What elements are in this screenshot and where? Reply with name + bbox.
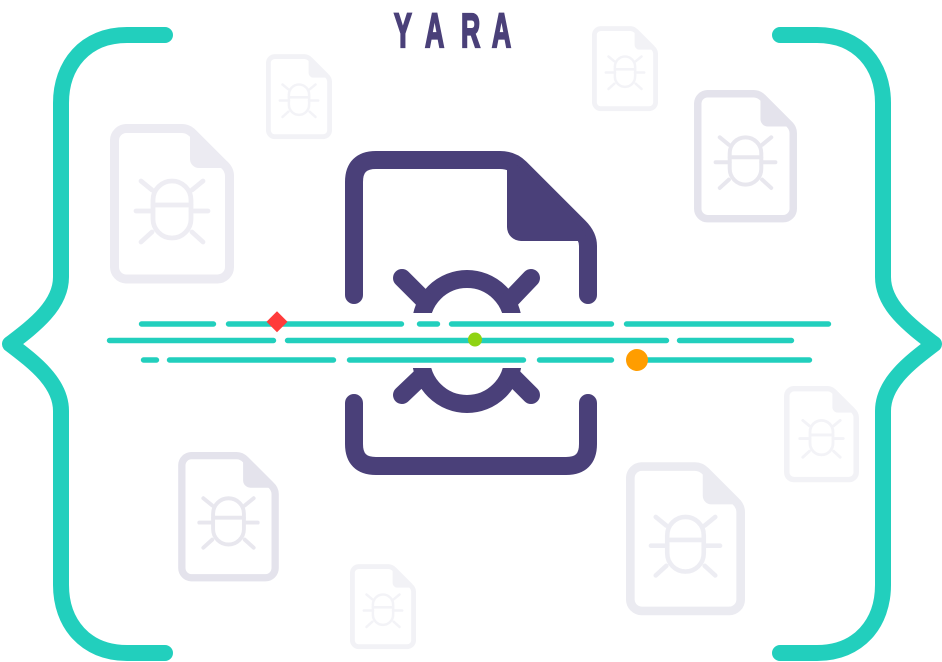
background file icon: top centre small — [594, 29, 656, 109]
background file icon: top right — [698, 94, 793, 219]
file fold — [500, 160, 588, 241]
marker: orange dot — [626, 349, 648, 371]
scan lines — [110, 324, 828, 360]
title: YARA — [394, 5, 511, 58]
bug lower half — [393, 368, 540, 413]
background file icon: bottom centre small — [352, 567, 414, 647]
marker: red diamond — [266, 311, 288, 332]
left curly bracket — [10, 35, 165, 653]
file outline bottom — [354, 403, 588, 466]
bug upper half — [393, 269, 540, 313]
right curly bracket — [780, 35, 934, 653]
file outline top — [354, 160, 588, 295]
background file icon: bottom left — [182, 456, 275, 578]
central file icon with bug — [354, 160, 588, 466]
background file icon: large left — [114, 128, 230, 279]
marker: green dot — [468, 332, 482, 346]
background file icon: bottom right — [630, 467, 741, 611]
background file icon: right small — [787, 389, 856, 480]
background file icon: top left small — [268, 57, 330, 137]
